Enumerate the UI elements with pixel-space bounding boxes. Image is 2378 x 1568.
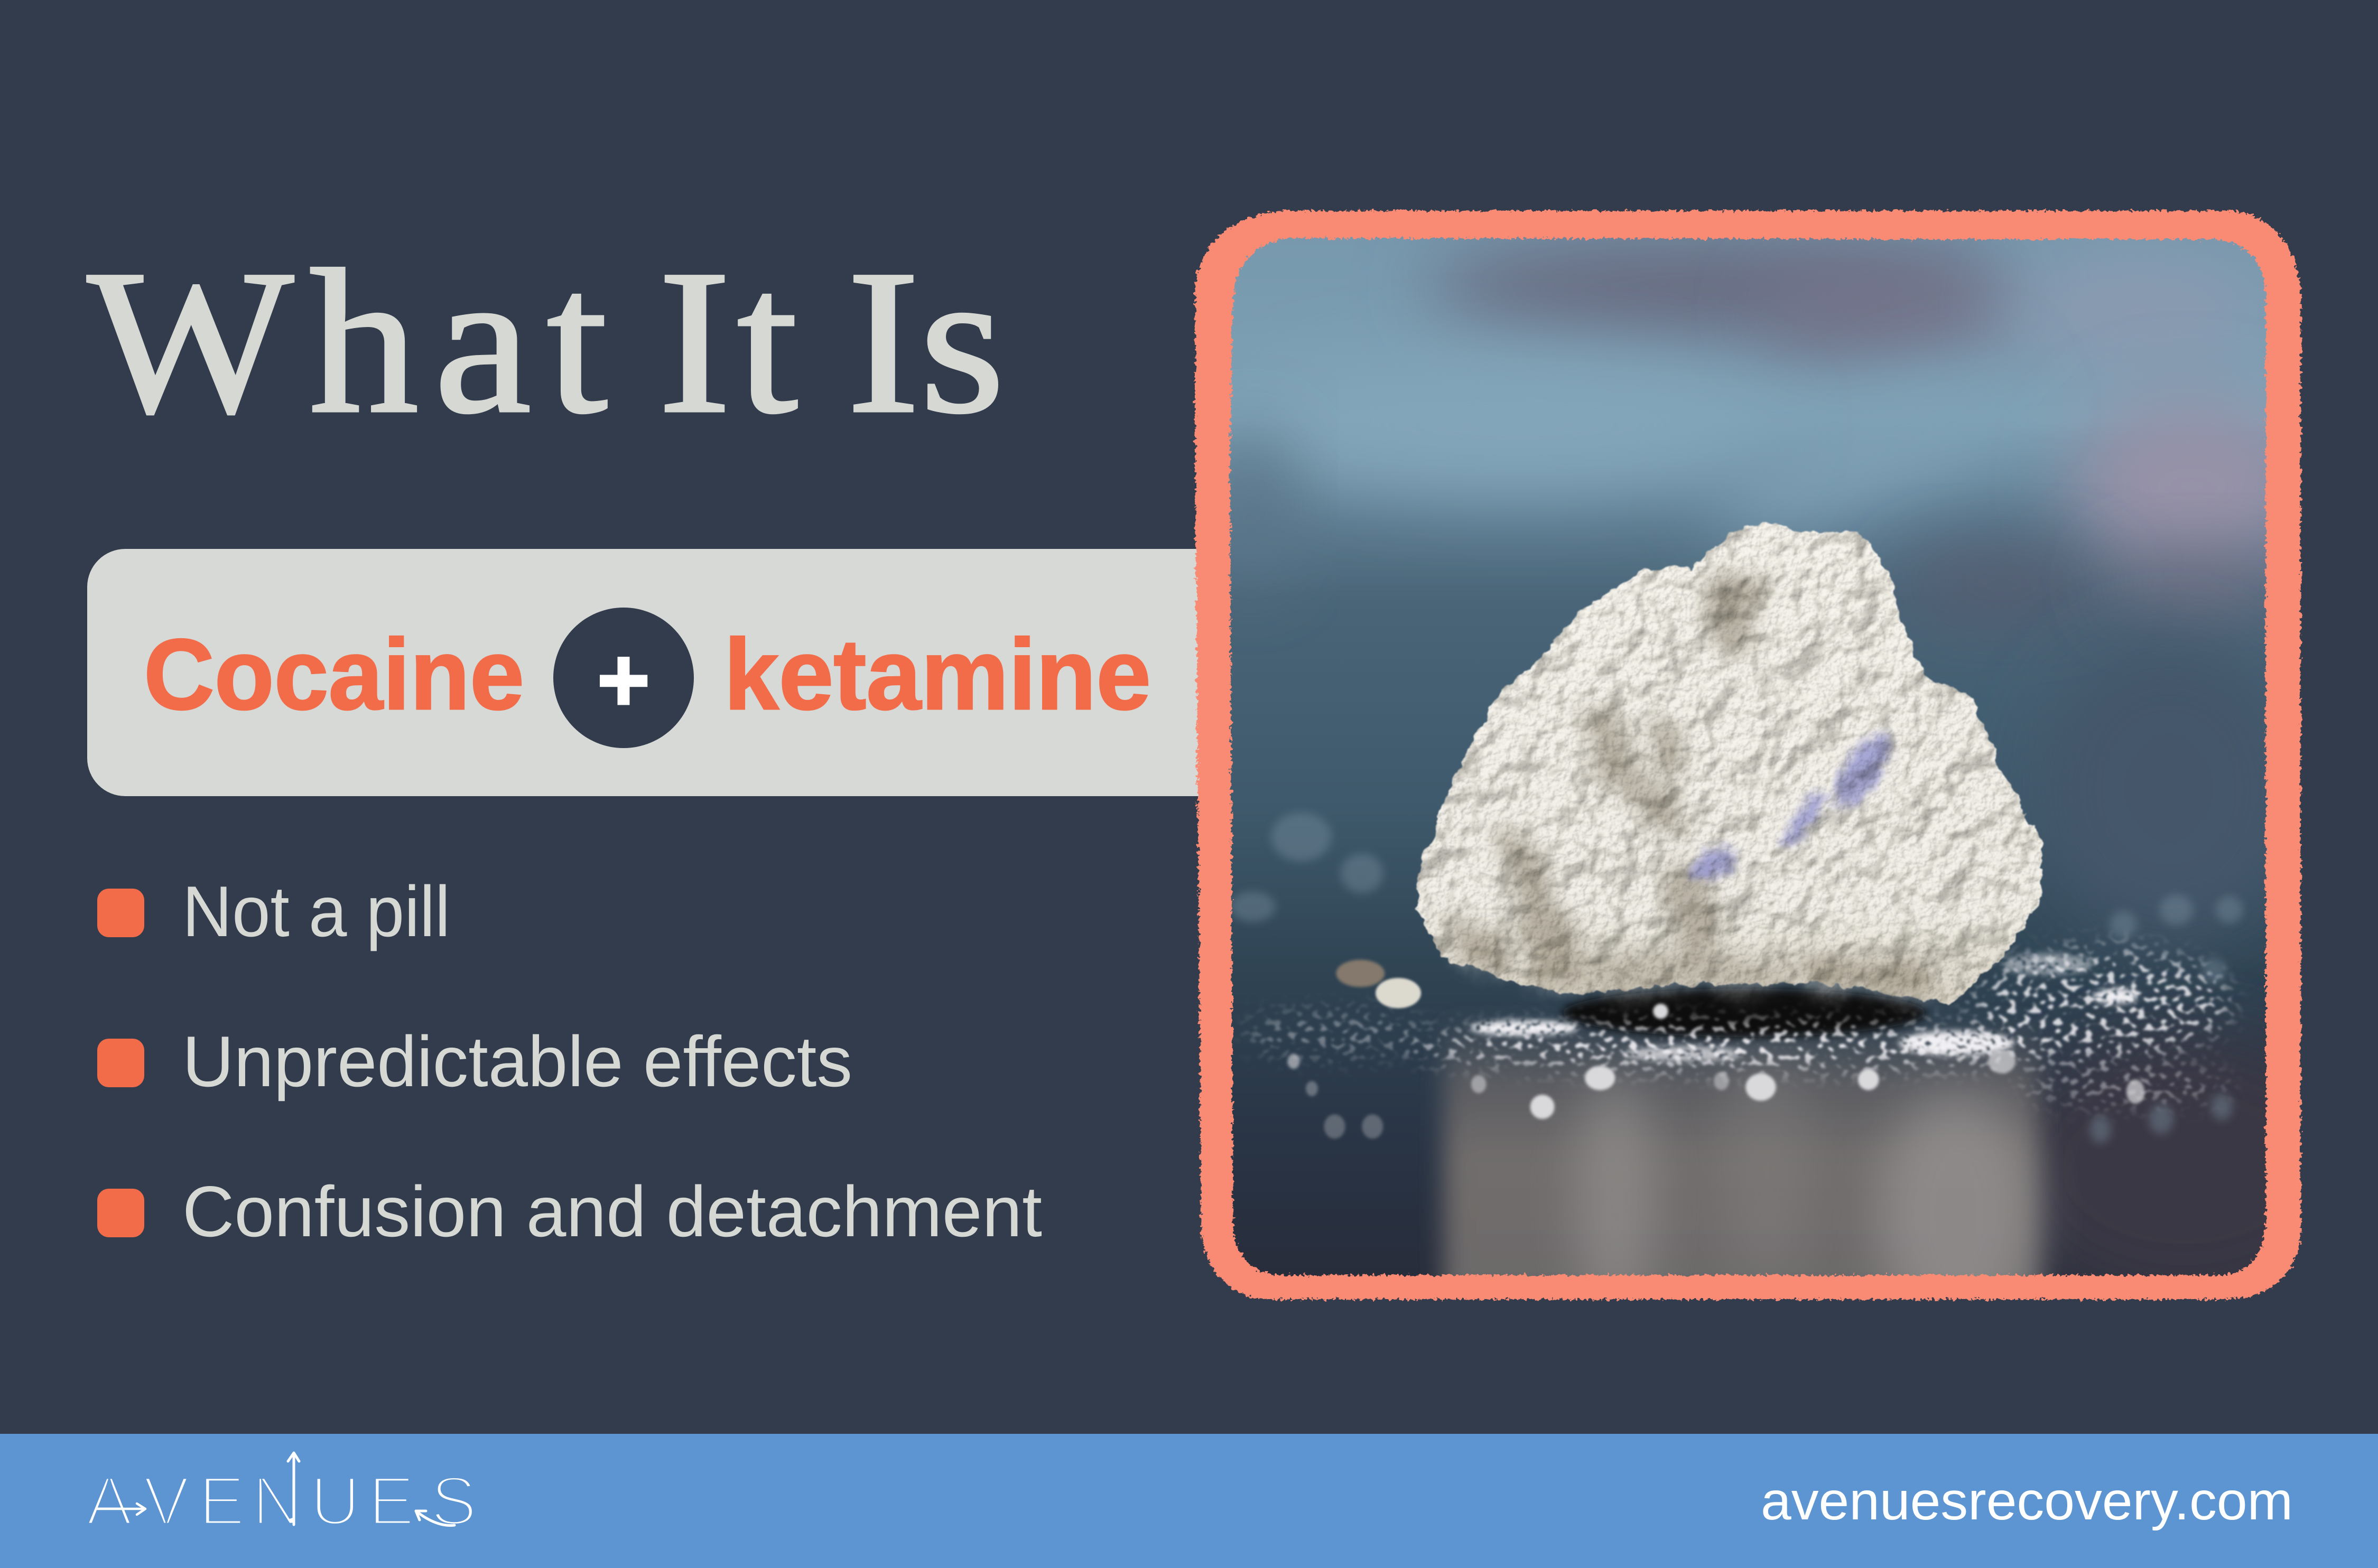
purple stain (1686, 725, 1902, 887)
bullet: unpredictable effects: Unpredictable effects (182, 1021, 852, 1102)
title: Is (847, 228, 1005, 455)
rock shading (1433, 568, 1941, 1001)
footer band (0, 1434, 2378, 1568)
photo backdrop (1228, 236, 2269, 1277)
powder specks (1243, 949, 2230, 1102)
logo arrows (97, 1453, 454, 1526)
dark shadow under rock (1562, 988, 1926, 1037)
panel: formula pill (87, 549, 1210, 796)
small rock fragments (1336, 960, 1421, 1008)
rock (1416, 521, 2041, 1005)
bullet: confusion and detachment: Confusion and detachment (182, 1171, 1042, 1252)
photo: white rock on reflective surface (1228, 236, 2269, 1278)
label: ketamine: ketamine (724, 619, 1151, 731)
bullet list (97, 871, 1042, 1252)
label: cocaine: Cocaine (144, 619, 524, 731)
website url: avenuesrecovery.com (1761, 1471, 2293, 1531)
title: It (658, 228, 804, 455)
logo: Avenues: AVENUES (86, 1462, 477, 1539)
bokeh spots (1230, 813, 2243, 1143)
large blurred droplets (1288, 1004, 2144, 1138)
title: What (87, 228, 623, 455)
panel: framed photo (1183, 197, 2366, 1334)
rough coral frame (1195, 211, 2301, 1300)
icon: plus in circle: + (597, 629, 650, 731)
reflection of rock (1429, 1026, 2061, 1278)
pill background (87, 549, 1210, 796)
bullet: not a pill: Not a pill (182, 871, 450, 951)
icon: plus in circle (553, 608, 694, 748)
powder heaps (1470, 954, 2139, 1061)
